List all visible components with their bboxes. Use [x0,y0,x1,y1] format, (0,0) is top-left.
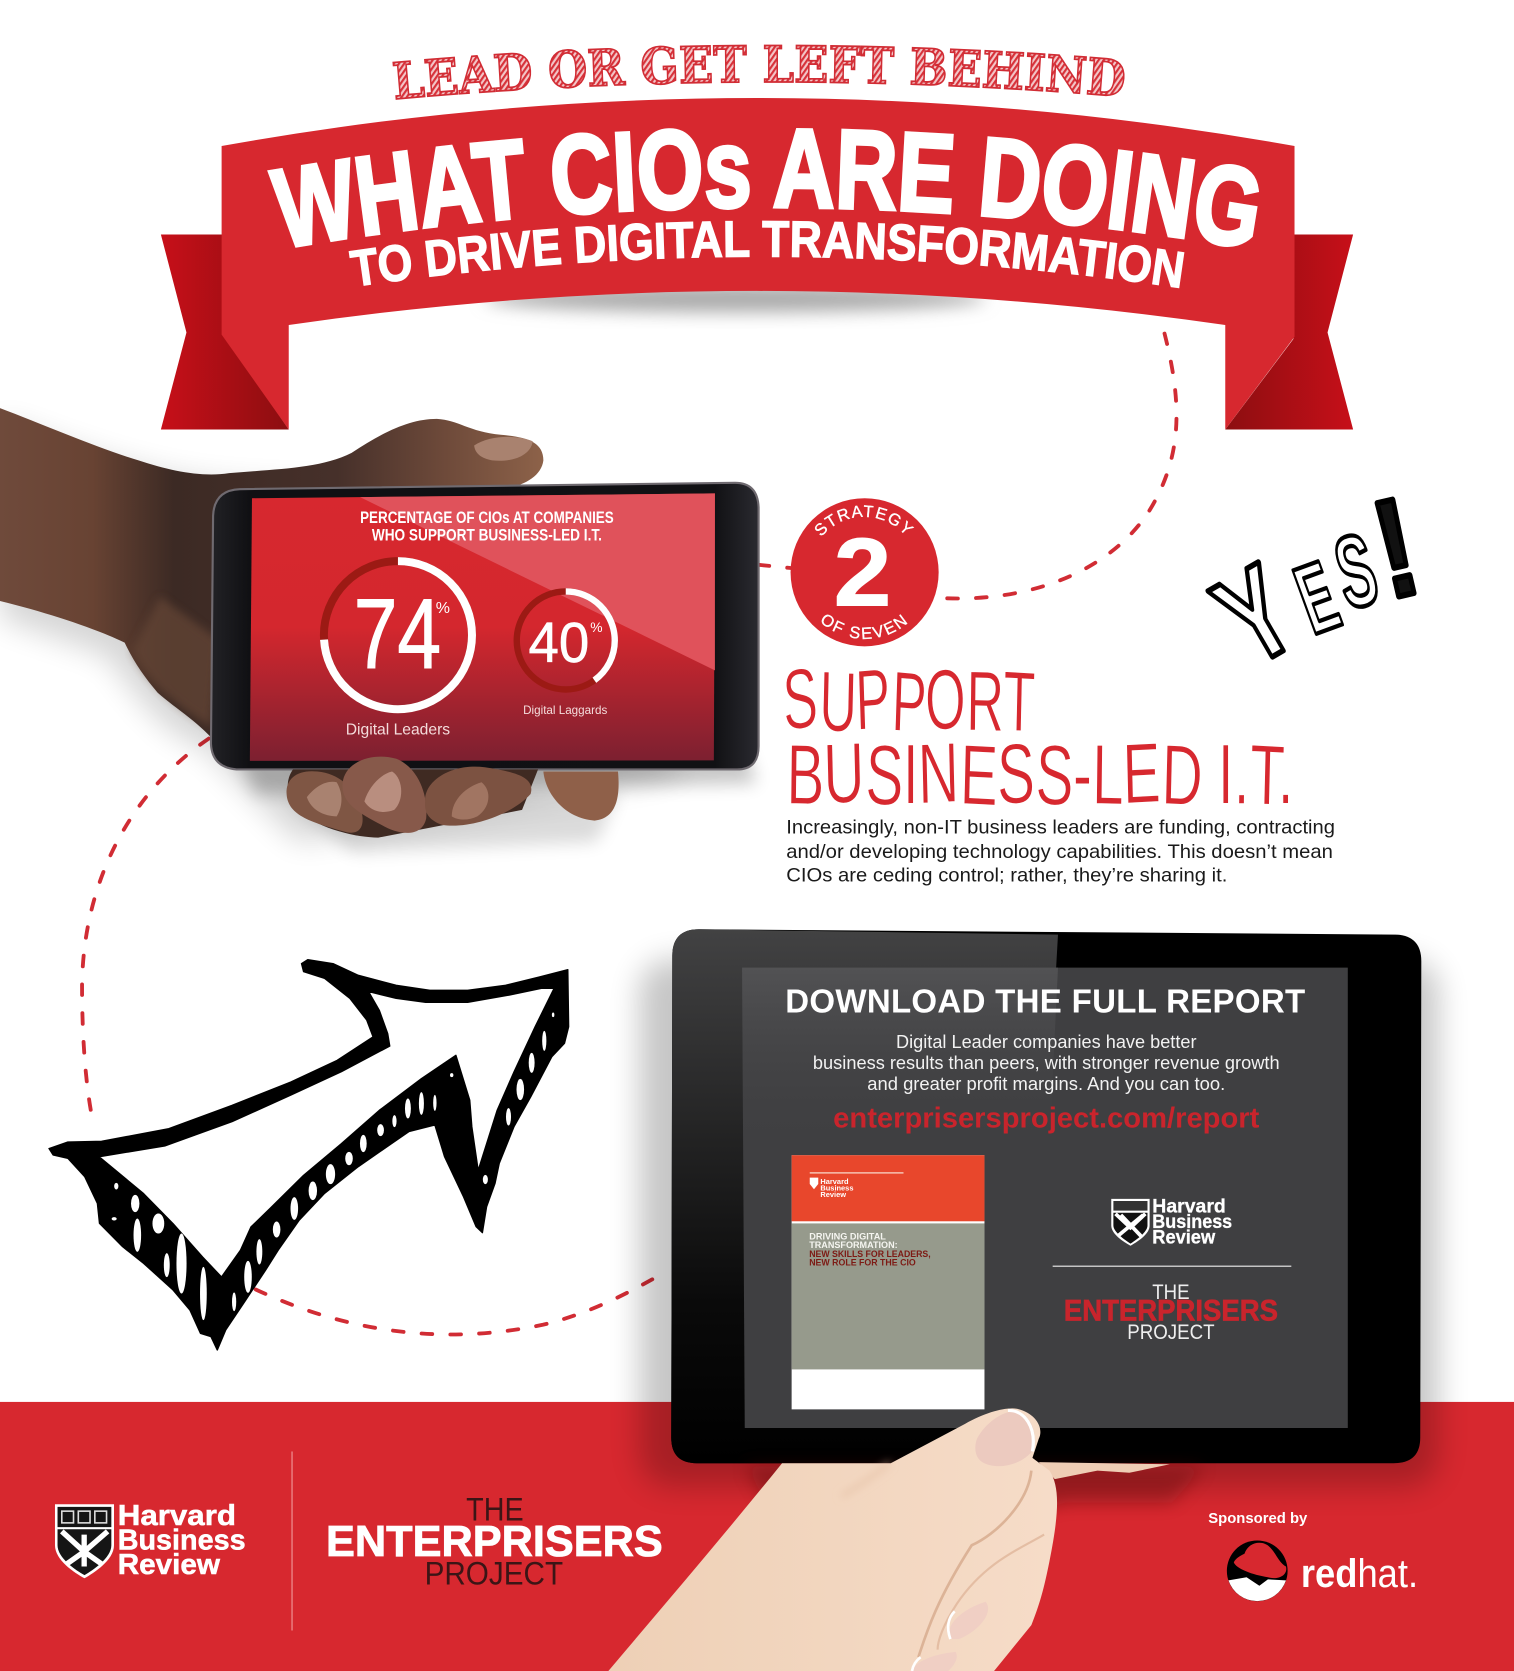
strategy badge [790,498,939,646]
download description [813,1032,1280,1094]
tablet hbr logo: Harvard [1152,1196,1226,1218]
fingers gripping phone [287,757,619,853]
phone chart title: PERCENTAGE OF CIOs AT COMPANIES [360,509,614,527]
label: digital laggards: Digital Laggards [523,703,607,717]
tablet hbr logo: Business [1152,1211,1232,1233]
download description: Digital Leader companies have better [896,1032,1196,1052]
donut: digital leaders 74 percent: % [436,600,450,617]
tablet body [671,929,1421,1463]
strategy description [786,816,1335,886]
tablet [639,929,1438,1487]
cover title: NEW ROLE FOR THE CIO [809,1258,916,1268]
redhat wordmark: redhat. [1301,1552,1418,1596]
sponsor label: Sponsored by [1208,1511,1308,1527]
strategy heading: BUSINESS-LED I.T. [786,726,1293,824]
banner ribbon [160,98,1354,430]
cover logo: Business [820,1183,853,1192]
left ribbon tail [161,234,289,429]
footer enterprisers project logo: PROJECT [425,1556,563,1592]
screen glare [360,493,715,670]
tablet hbr logo [1111,1196,1232,1249]
hbr wordmark: Business [118,1525,246,1557]
label: digital leaders: Digital Leaders [346,721,450,738]
thumb nail [474,437,533,461]
hand-drawn arrow [49,959,569,1350]
tablet glare [671,929,1058,1463]
ribbon shadow [485,285,986,312]
right ribbon tail [1225,234,1353,429]
hbr wordmark [118,1500,246,1581]
phone screen [250,493,715,761]
footer enterprisers project logo: ENTERPRISERS [326,1517,663,1566]
donut: digital leaders 74 percent [324,561,472,709]
yes exclamation doodle: Y [1192,537,1318,693]
hand holding phone: arm [0,408,682,842]
badge number: 2 [834,517,891,626]
donut: digital laggards 40 percent: 40 [528,611,589,674]
hbr wordmark: Review [118,1549,221,1581]
report cover [792,1155,984,1409]
footer hbr logo [55,1500,246,1581]
donut: digital leaders 74 percent: 74 [354,578,441,689]
footer band [0,1402,1514,1671]
strategy description: CIOs are ceding control; rather, they’re sharing it. [786,864,1227,886]
sub headline: TO DRIVE DIGITAL TRANSFORMATION [348,220,1184,288]
icon: red hat [1227,1540,1288,1601]
cover logo [810,1177,853,1199]
tablet enterprisers project logo: THE [1152,1280,1190,1304]
red hat logo [1227,1540,1418,1601]
footer enterprisers project logo: THE [466,1492,524,1528]
donut: digital laggards 40 percent [517,591,615,690]
kicker: lead or get left behind: LEAD OR GET LEFT BEHIND [392,44,1125,100]
download heading: DOWNLOAD THE FULL REPORT [785,982,1305,1019]
yes exclamation doodle: S [1325,513,1388,631]
phone chart title [360,509,614,544]
hbr wordmark: Harvard [118,1500,236,1532]
donut: digital laggards 40 percent: % [590,619,603,635]
yes exclamation doodle: ! [1360,467,1432,628]
headline: WHAT CIOs ARE DOING [267,128,1260,248]
cover title: DRIVING DIGITAL [809,1231,886,1241]
thumb and finger creases [842,1463,890,1496]
dashed connector lines [82,334,1177,1334]
strategy heading: SUPPORT [779,652,1037,751]
cover title [809,1231,931,1268]
cover logo: Harvard [820,1177,849,1186]
second finger nail [912,1652,957,1671]
tablet hbr logo: Review [1152,1227,1216,1249]
badge bottom label: OF SEVEN [822,614,908,640]
hand holding tablet [608,1408,1204,1671]
strategy heading [779,652,1293,824]
badge top label: STRATEGY [814,505,914,536]
cover logo: Review [820,1190,846,1199]
phone body [211,483,759,769]
tablet shadow [639,959,1438,1487]
tablet enterprisers project logo [1064,1280,1278,1344]
palm shading [132,597,218,727]
cover title: NEW SKILLS FOR LEADERS, [809,1249,931,1259]
phone [211,483,759,794]
report url: enterprisersproject.com/report [833,1102,1260,1134]
thumb nail [975,1411,1035,1466]
strategy description: and/or developing technology capabilities. This doesn’t mean [786,841,1333,863]
finger nail [949,1602,988,1639]
tablet logo divider [1053,1266,1291,1267]
cover title: TRANSFORMATION: [809,1240,898,1250]
hbr shield [55,1504,114,1578]
footer divider [291,1451,293,1631]
yes exclamation doodle [1192,467,1432,693]
tablet screen [742,968,1348,1428]
phone chart title: WHO SUPPORT BUSINESS-LED I.T. [372,526,602,544]
download description: business results than peers, with stronger revenue growth [813,1053,1280,1073]
ribbon main band [222,98,1295,429]
tablet enterprisers project logo: PROJECT [1127,1320,1215,1344]
download description: and greater profit margins. And you can too. [867,1074,1225,1094]
footer enterprisers project logo [326,1492,663,1592]
tablet enterprisers project logo: ENTERPRISERS [1064,1294,1278,1327]
yes exclamation doodle: E [1282,540,1352,655]
strategy description: Increasingly, non-IT business leaders are funding, contracting [786,816,1335,838]
phone shadow [234,751,756,794]
